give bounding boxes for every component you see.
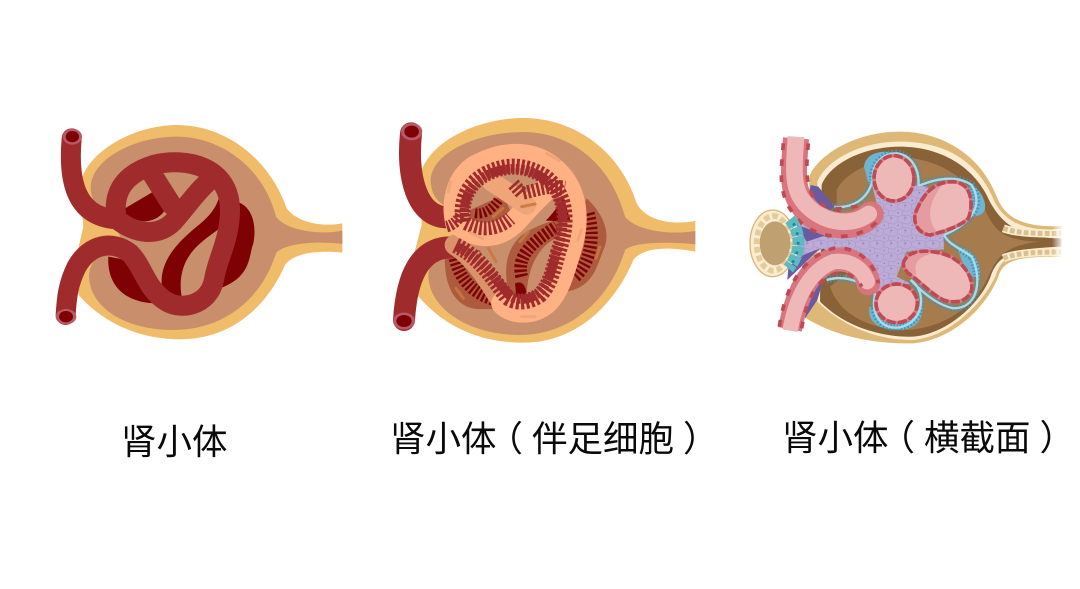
vessel opening top <box>401 123 422 140</box>
mesangium <box>797 183 944 292</box>
capsule outer wall <box>803 132 1062 343</box>
tail epithelial cells <box>1003 228 1062 258</box>
extraglomerular cells <box>787 185 835 318</box>
macula densa cells <box>788 219 799 268</box>
foot process slits <box>447 167 565 301</box>
capillary inner shading <box>906 183 943 275</box>
podocyte foot processes <box>827 153 977 328</box>
capsular space lighter region <box>830 158 1040 330</box>
back capillary loops <box>108 192 254 303</box>
tail fade <box>1052 223 1063 260</box>
podocyte nuclei <box>448 153 600 317</box>
podocyte cell bodies <box>864 152 985 330</box>
capsule cavity <box>89 137 342 330</box>
capsular space <box>820 147 1062 337</box>
afferent and efferent arterioles <box>404 133 452 320</box>
capillary endothelial nuclei <box>874 156 972 323</box>
podocyte tube <box>455 156 575 311</box>
macula densa tubule <box>750 210 795 277</box>
glomerular capillaries <box>874 156 972 323</box>
back capillary loops <box>445 195 606 309</box>
parietal cell layer <box>817 142 1062 340</box>
panel: renal corpuscle <box>56 125 342 339</box>
panel: renal corpuscle cross-section <box>750 132 1063 343</box>
front capillary tuft <box>66 138 230 315</box>
capsule outer wall <box>73 125 342 339</box>
arteriole walls <box>790 137 884 331</box>
capsule outer wall <box>411 118 695 343</box>
dark capillary wedge <box>546 197 571 222</box>
back capillary slits <box>455 195 591 300</box>
caption: renal corpuscle with podocytes: 肾小体（ 伴足细胞 ） <box>390 419 719 459</box>
vessel opening bottom <box>56 309 76 324</box>
capsule cavity <box>428 132 695 335</box>
vessel opening bottom <box>393 313 415 329</box>
arteriole smooth muscle cells <box>779 143 882 328</box>
caption: renal corpuscle: 肾小体 <box>121 422 228 462</box>
vessel opening top <box>63 129 82 145</box>
panel: renal corpuscle with podocytes <box>393 118 695 343</box>
mesangial cell mesh <box>797 183 944 292</box>
caption: renal corpuscle cross-section: 肾小体（ 横截面 ） <box>782 418 1075 458</box>
